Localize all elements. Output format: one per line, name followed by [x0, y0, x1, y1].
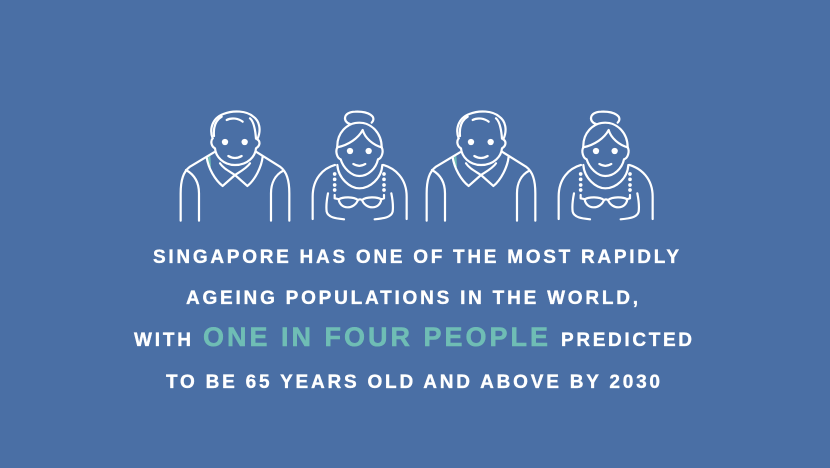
text: line 1: SINGAPORE HAS ONE OF THE MOST RAPIDLY [153, 247, 679, 268]
text: line 3 predicted: PREDICTED [561, 330, 692, 351]
text: line 4: TO BE 65 YEARS OLD AND ABOVE BY 2030 [166, 372, 660, 393]
icon: elderly woman 2 [559, 112, 653, 219]
highlight: one in four people: ONE IN FOUR PEOPLE [203, 322, 548, 352]
text: line 2: AGEING POPULATIONS IN THE WORLD, [186, 288, 638, 309]
icon: elderly woman 1 [313, 112, 407, 219]
text: line 3 with: WITH [134, 330, 191, 351]
icon: elderly man 2 [427, 111, 535, 221]
icon: elderly man 1 [181, 111, 289, 221]
